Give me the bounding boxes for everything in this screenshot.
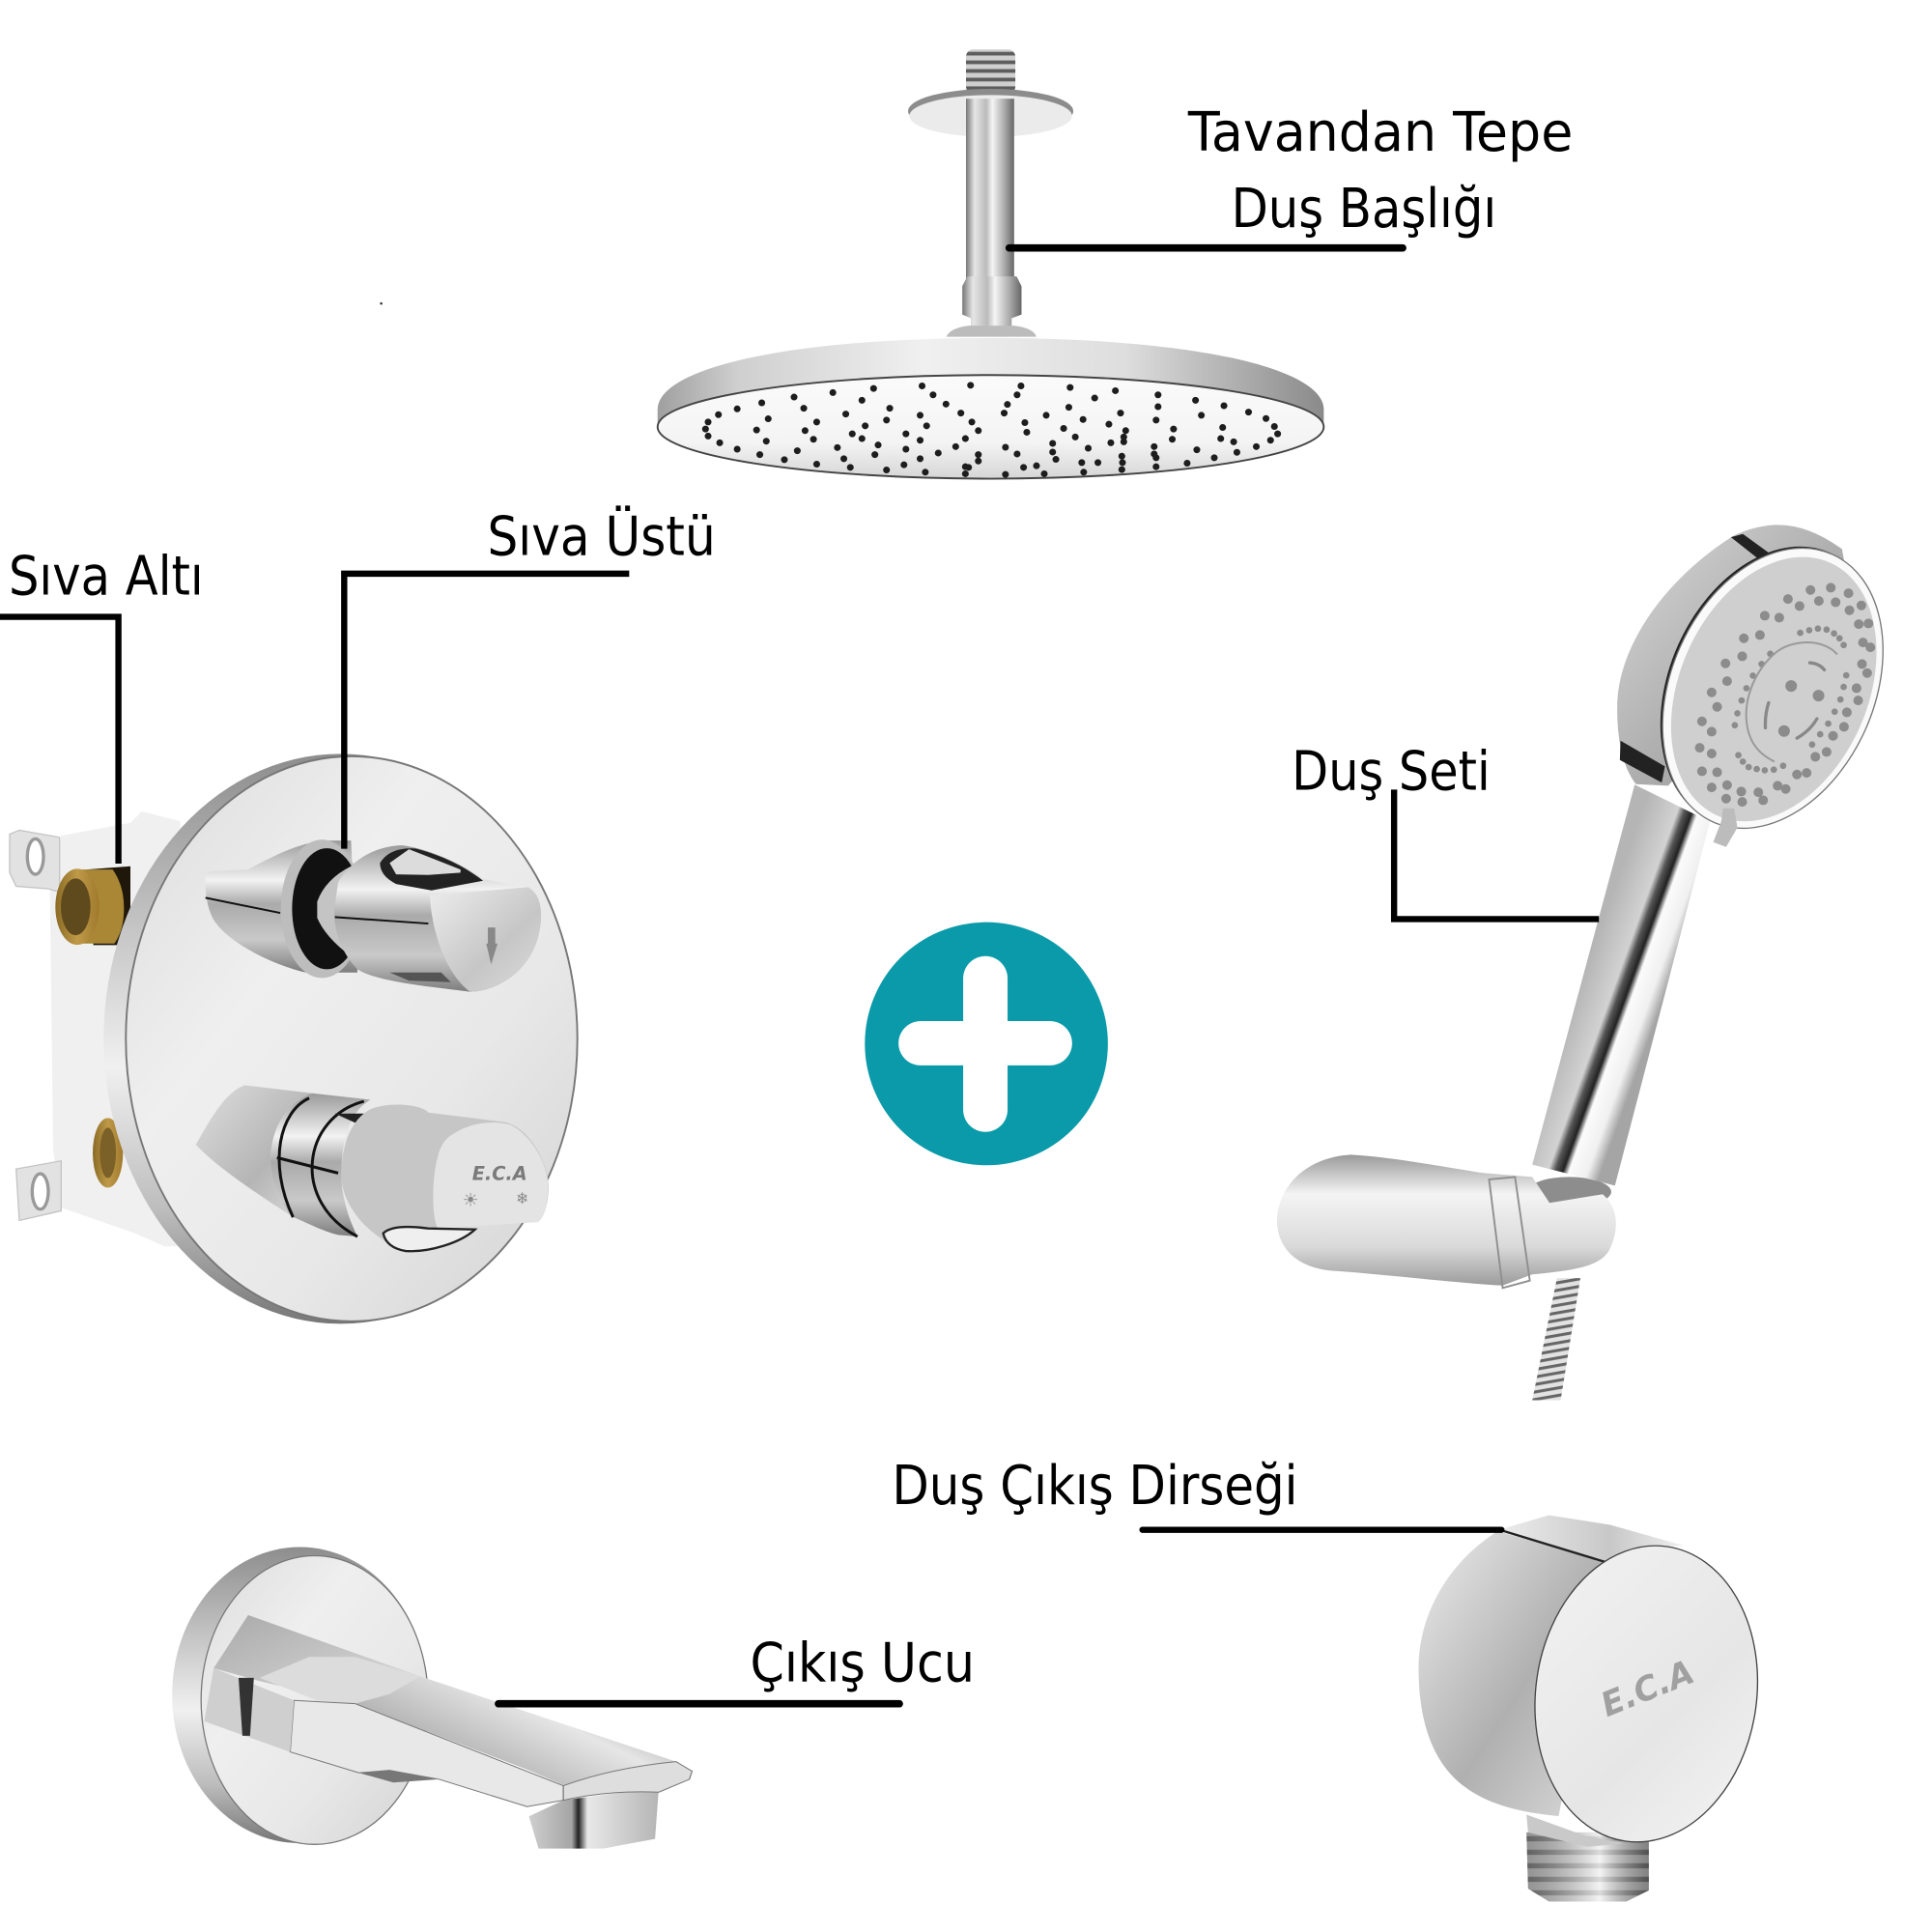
underside shadow bbox=[359, 1771, 440, 1782]
upper wedge bbox=[213, 1615, 420, 1704]
label: Tavandan Tepe Duş Başlığı bbox=[1187, 101, 1573, 241]
lower bracket bbox=[16, 1161, 61, 1220]
handle bbox=[1532, 784, 1710, 1185]
ring reflection bbox=[335, 1114, 370, 1123]
left lever bbox=[206, 840, 357, 973]
knob body bbox=[341, 1105, 549, 1242]
cover plate rim bbox=[103, 753, 578, 1323]
label: Sıva Altı: Sıva Altı bbox=[9, 546, 204, 609]
speck bbox=[380, 302, 383, 304]
knob face bbox=[430, 887, 541, 992]
centre ring bbox=[1747, 642, 1837, 761]
thread bbox=[1526, 1833, 1649, 1901]
block groove bbox=[239, 1678, 254, 1736]
label: Sıva Üstü: Sıva Üstü bbox=[487, 504, 716, 569]
panel: hand shower with holder bbox=[1277, 512, 1925, 1401]
spout parts bbox=[204, 1615, 692, 1849]
vertical pipe bbox=[966, 99, 1014, 279]
neck bbox=[1526, 1814, 1623, 1847]
head body bbox=[658, 338, 1323, 440]
leader line: Duş Çıkış Dirseği bbox=[1143, 1527, 1501, 1532]
chrome ring bbox=[270, 1094, 370, 1236]
panel: spout bbox=[172, 1548, 692, 1849]
head face bbox=[1632, 525, 1916, 854]
base block bbox=[204, 1668, 294, 1752]
leader line: Sıva Üstü bbox=[344, 574, 629, 849]
underside slot bbox=[389, 973, 451, 982]
lower brass thread bbox=[99, 1127, 116, 1178]
leader line: ceiling shower bbox=[1009, 245, 1403, 251]
cold icon: ❄ bbox=[516, 1189, 528, 1208]
logo: E.C.A bbox=[472, 1162, 527, 1184]
centre nozzles bbox=[1784, 686, 1819, 731]
concealed box bbox=[50, 811, 181, 1246]
holder ring bbox=[1490, 1177, 1530, 1288]
body top edge bbox=[1499, 1529, 1607, 1562]
centre arcs bbox=[1765, 663, 1825, 738]
ceiling flange bbox=[908, 89, 1073, 137]
upper brass thread bbox=[61, 878, 91, 935]
leader line: Duş Seti bbox=[1394, 789, 1599, 919]
lower brass fitting bbox=[93, 1118, 123, 1187]
panel: concealed mixer bbox=[10, 753, 578, 1323]
barrel bbox=[355, 1676, 676, 1786]
elbow front bbox=[1517, 1531, 1776, 1857]
arrow mark bbox=[486, 927, 497, 964]
elbow top band bbox=[1499, 1515, 1685, 1562]
lower back band bbox=[1620, 741, 1665, 782]
threaded connector bbox=[966, 49, 1015, 94]
label: Çıkış Ucu: Çıkış Ucu bbox=[751, 1633, 975, 1695]
knob recess bbox=[380, 848, 483, 891]
label: Duş Seti: Duş Seti bbox=[1292, 740, 1491, 803]
outer nozzles bbox=[1700, 587, 1870, 802]
recess highlight bbox=[389, 849, 461, 875]
leader line: Sıva Altı bbox=[0, 617, 119, 864]
nozzles bbox=[705, 385, 1278, 474]
icon: plus sign bbox=[865, 923, 1108, 1165]
swivel joint bbox=[1527, 1177, 1611, 1207]
lower bracket slot bbox=[32, 1174, 48, 1209]
rim shadow bbox=[1618, 512, 1922, 862]
thermostat handle bbox=[196, 1085, 549, 1251]
logo: E.C.A bbox=[1596, 1653, 1700, 1725]
leader line: Çıkış Ucu bbox=[498, 1701, 899, 1707]
outlet lip bbox=[563, 1762, 692, 1801]
inner stem bbox=[317, 867, 351, 956]
label: Tavandan Tepe Duş Başlığı: Duş Başlığı bbox=[1232, 178, 1496, 241]
back stripe bbox=[1731, 534, 1779, 565]
dark mounting block bbox=[87, 867, 130, 945]
upper bracket bbox=[10, 830, 60, 892]
cover plate face bbox=[126, 756, 578, 1321]
knob bbox=[334, 845, 541, 992]
lever seam bbox=[206, 897, 280, 913]
hub bbox=[260, 1657, 420, 1704]
head face bbox=[658, 375, 1323, 479]
upper brass face bbox=[55, 868, 99, 945]
elbow body bbox=[1419, 1531, 1607, 1816]
diverter handle bbox=[206, 839, 541, 992]
nut and neck bbox=[962, 276, 1021, 328]
dark collar interior bbox=[292, 848, 361, 969]
panel: shower outlet elbow bbox=[1419, 1515, 1776, 1901]
wall plate rim bbox=[172, 1548, 428, 1843]
middle nozzles bbox=[1735, 629, 1846, 770]
hose bbox=[1532, 1278, 1580, 1401]
wall plate face bbox=[201, 1555, 428, 1844]
holder bbox=[1277, 1154, 1616, 1286]
head rim bbox=[1621, 513, 1925, 864]
label: Duş Çıkış Dirseği: Duş Çıkış Dirseği bbox=[892, 1455, 1298, 1518]
box and brackets bbox=[10, 811, 181, 1246]
head mount bbox=[947, 326, 1037, 337]
panel: ceiling rain shower head bbox=[658, 49, 1323, 479]
label: Tavandan Tepe Duş Başlığı: Tavandan Tepe bbox=[1187, 101, 1573, 164]
outlet barrel bbox=[529, 1787, 659, 1849]
knob face bbox=[433, 1122, 548, 1229]
lower grip bbox=[384, 1227, 475, 1251]
collar bbox=[281, 839, 363, 978]
shower head bbox=[1617, 512, 1925, 864]
ring grooves bbox=[277, 1098, 364, 1236]
head back bbox=[1617, 525, 1849, 785]
upper brass fitting bbox=[77, 869, 124, 944]
knob seam bbox=[335, 917, 428, 923]
upper bracket slot bbox=[27, 838, 43, 874]
hot icon: ☀ bbox=[463, 1190, 478, 1210]
left cone bbox=[196, 1085, 312, 1217]
mode tab bbox=[1714, 809, 1738, 847]
lower body bbox=[290, 1700, 563, 1806]
